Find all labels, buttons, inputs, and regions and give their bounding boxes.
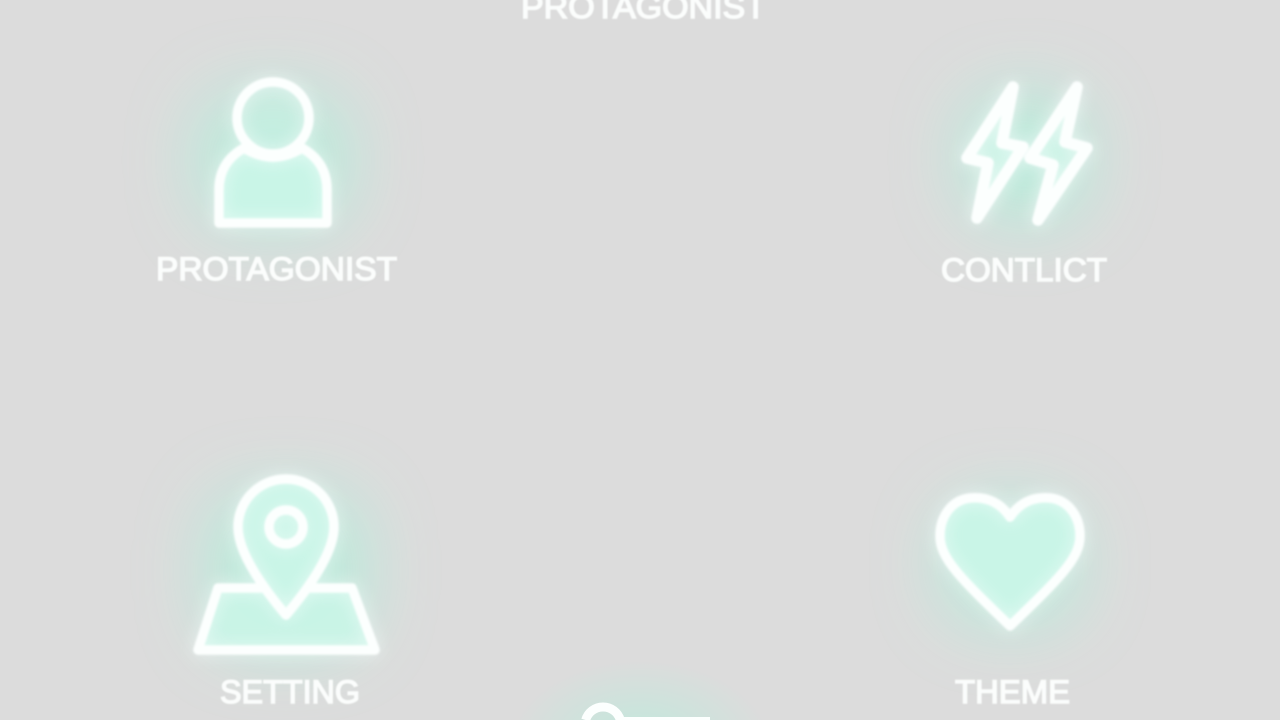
label: protagonist: PROTAGONIST	[156, 251, 397, 287]
label: theme: THEME	[955, 674, 1070, 710]
label: conflict: CONTLICT	[941, 252, 1107, 288]
label: setting: SETTING	[220, 674, 360, 710]
icon: conflict lightning bolts	[960, 87, 1090, 225]
icon: protagonist person	[195, 82, 351, 230]
icon: theme heart	[940, 498, 1080, 626]
icon: cropped bottom symbol	[510, 640, 770, 720]
icon: setting map pin	[198, 479, 375, 650]
